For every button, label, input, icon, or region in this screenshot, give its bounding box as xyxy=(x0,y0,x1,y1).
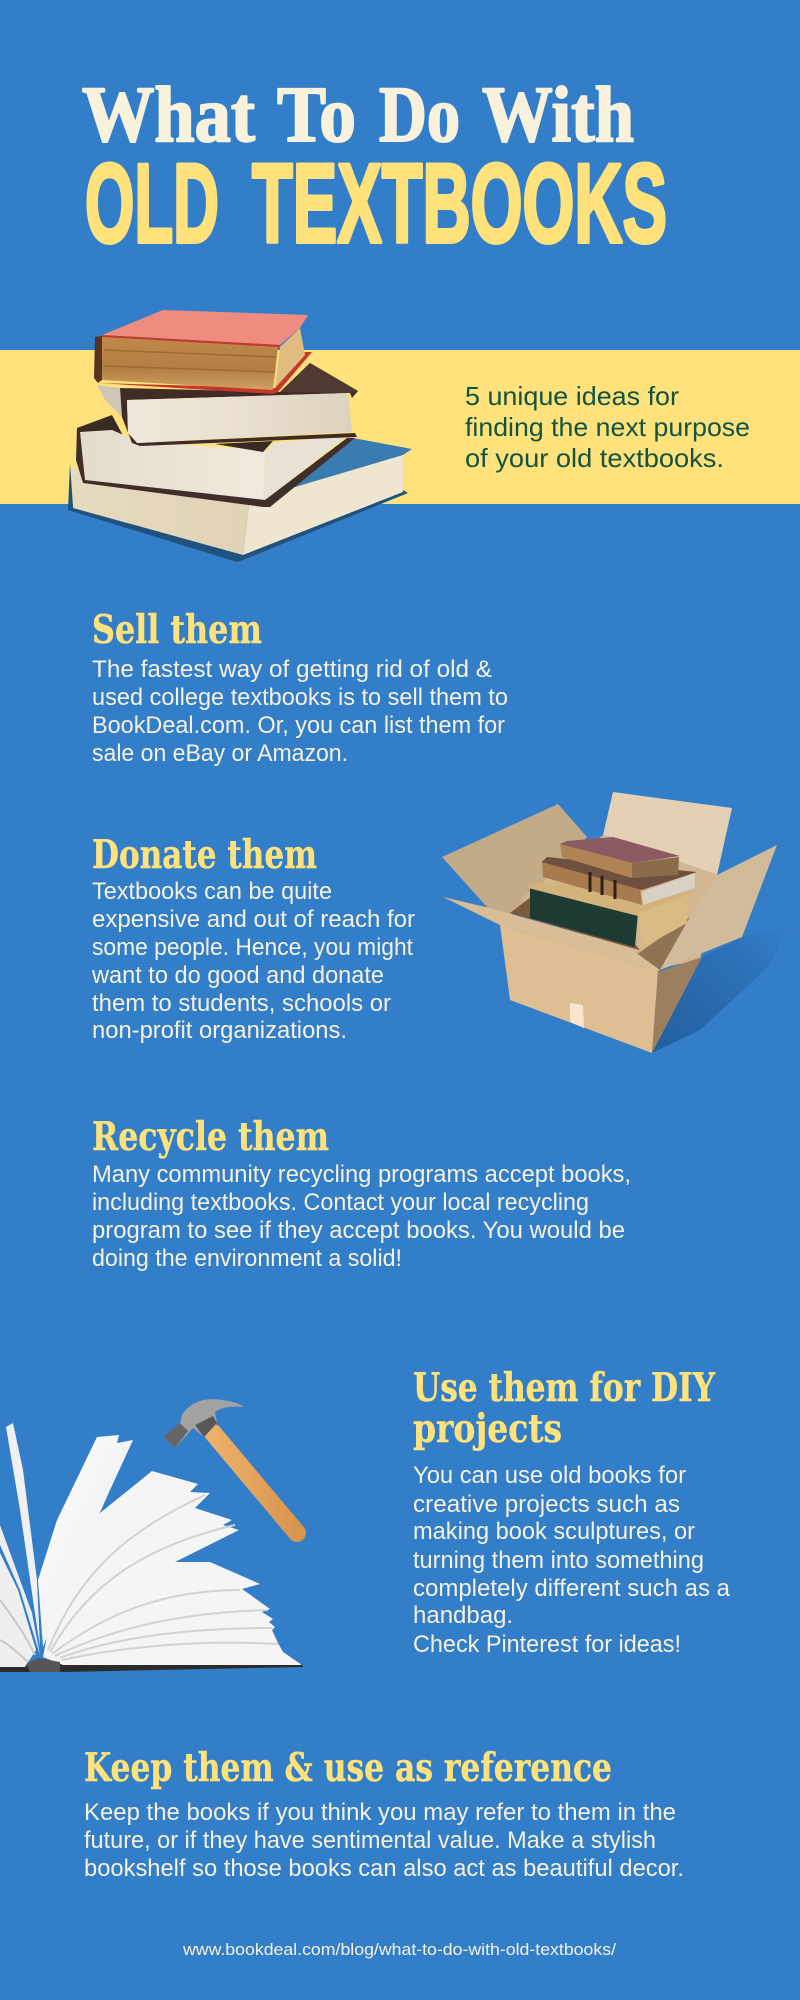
icon: hammer xyxy=(163,1399,297,1533)
panel: use them for DIY projects xyxy=(413,1365,731,1658)
text: donate them body: expensive and out of reach for xyxy=(92,906,415,933)
text: DIY body: creative projects such as xyxy=(413,1491,680,1518)
source url: www.bookdeal.com/blog/what-to-do-with-old-textbooks/ xyxy=(182,1940,616,1959)
title xyxy=(82,72,667,266)
text: DIY body: completely different such as a xyxy=(413,1575,731,1602)
text: recycle them body: doing the environment a solid! xyxy=(92,1245,402,1272)
band intro text xyxy=(465,381,750,473)
title: What xyxy=(82,72,255,159)
band intro text: 5 unique ideas for xyxy=(465,381,679,411)
text: DIY body: making book sculptures, or xyxy=(413,1518,695,1545)
text: recycle them body xyxy=(92,1161,631,1272)
text: keep them body: Keep the books if you think you may refer to them in the xyxy=(84,1799,676,1826)
yellow band xyxy=(0,350,800,504)
text: donate them body xyxy=(91,878,415,1044)
text: keep them body: future, or if they have sentimental value. Make a stylish xyxy=(84,1827,656,1854)
title: Do xyxy=(379,72,460,159)
text: recycle them body: Many community recycling programs accept books, xyxy=(92,1161,631,1188)
title: OLD xyxy=(85,141,219,266)
title: To xyxy=(277,72,356,159)
text: sell them body: sale on eBay or Amazon. xyxy=(92,740,348,767)
text: DIY body xyxy=(413,1462,731,1658)
text: donate them body: some people. Hence, you might xyxy=(92,934,413,961)
heading: use them for DIY projects: projects xyxy=(413,1406,562,1452)
heading: recycle them: Recycle them xyxy=(92,1114,329,1160)
text: donate them body: them to students, schools or xyxy=(92,990,391,1017)
band intro text: of your old textbooks. xyxy=(465,443,724,473)
panel: sell them xyxy=(92,607,508,767)
heading: keep them: Keep them & use as reference xyxy=(84,1745,612,1791)
text: sell them body: BookDeal.com. Or, you can list them for xyxy=(92,712,505,739)
panel: keep them xyxy=(84,1745,684,1882)
icon: open book xyxy=(0,1423,303,1672)
text: sell them body: The fastest way of getting rid of old & xyxy=(92,656,492,683)
heading: use them for DIY projects xyxy=(413,1365,716,1452)
icon: cardboard box with books xyxy=(442,792,790,1053)
text: donate them body: Textbooks can be quite xyxy=(92,878,332,905)
title: With xyxy=(482,72,634,159)
text: keep them body xyxy=(84,1799,684,1882)
text: keep them body: bookshelf so those books can also act as beautiful decor. xyxy=(84,1855,684,1882)
heading: sell them: Sell them xyxy=(92,607,262,653)
text: donate them body: non-profit organizations. xyxy=(92,1017,347,1044)
panel: recycle them xyxy=(92,1114,631,1272)
text: DIY body: turning them into something xyxy=(413,1547,704,1574)
text: DIY body: You can use old books for xyxy=(413,1462,686,1489)
text: DIY body: Check Pinterest for ideas! xyxy=(413,1631,681,1658)
panel: donate them xyxy=(91,832,415,1044)
icon: stack of books xyxy=(68,310,412,562)
heading: donate them: Donate them xyxy=(92,832,317,878)
text: recycle them body: program to see if they accept books. You would be xyxy=(92,1217,625,1244)
text: sell them body xyxy=(92,656,508,767)
text: recycle them body: including textbooks. Contact your local recycling xyxy=(92,1189,589,1216)
band intro text: finding the next purpose xyxy=(465,412,750,442)
heading: use them for DIY projects: Use them for DIY xyxy=(413,1365,716,1411)
text: sell them body: used college textbooks is to sell them to xyxy=(92,684,508,711)
text: DIY body: handbag. xyxy=(413,1602,513,1629)
text: donate them body: want to do good and donate xyxy=(91,962,384,989)
